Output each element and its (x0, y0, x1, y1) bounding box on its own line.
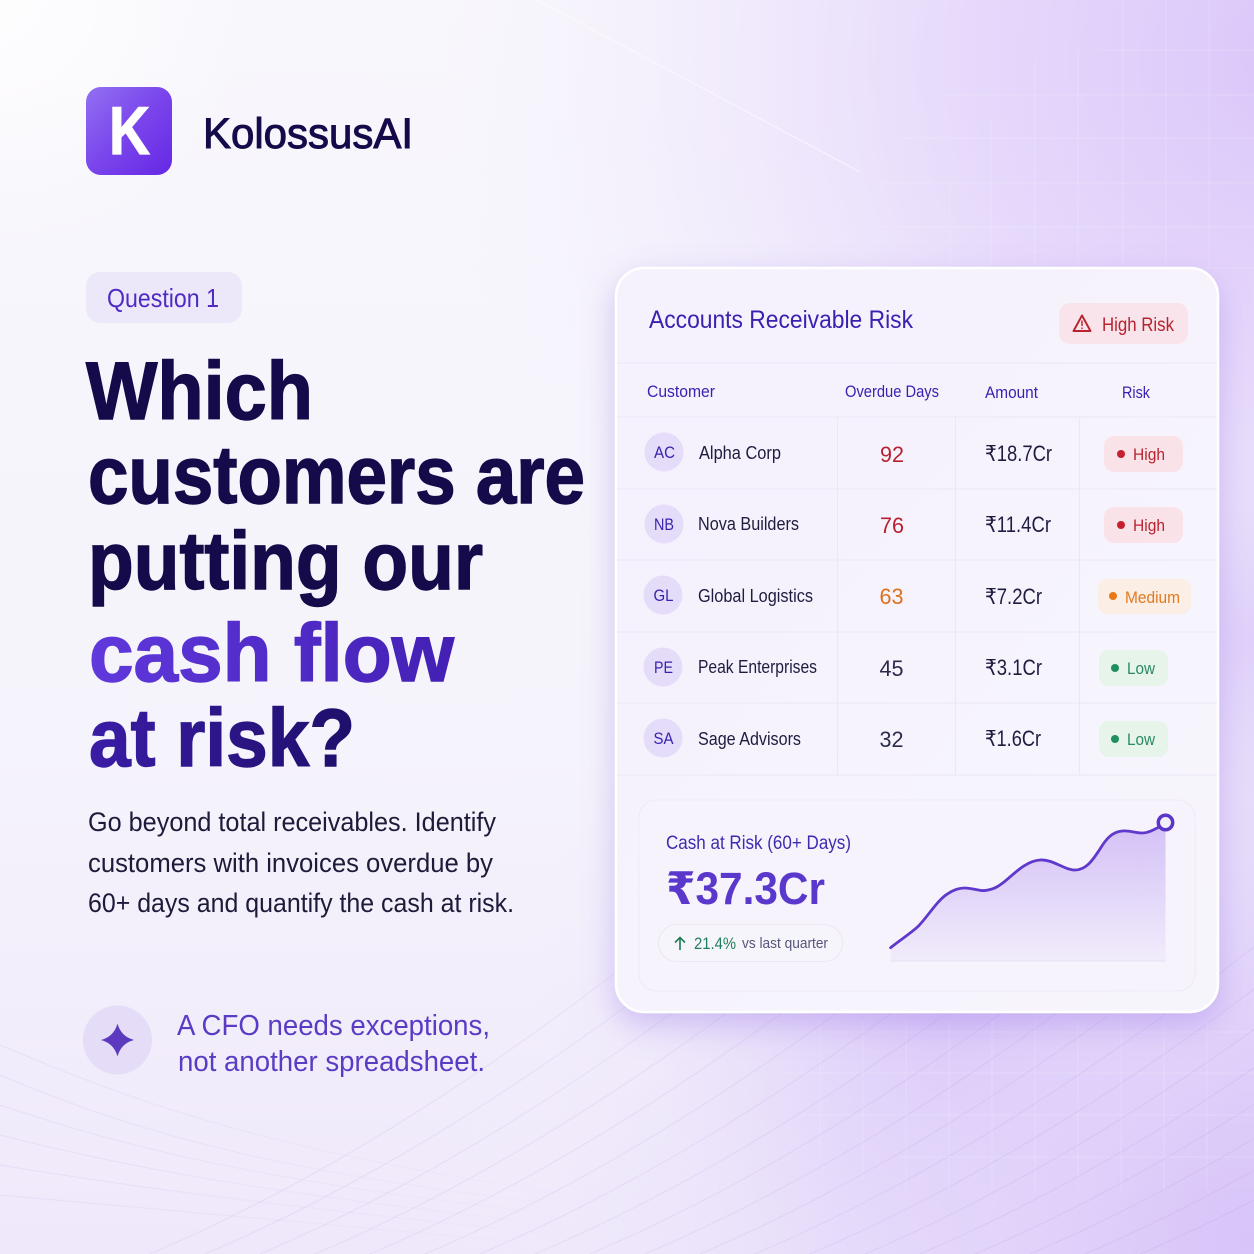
row: Global Logistics: GL (654, 586, 674, 605)
table header: Amount (985, 384, 1038, 402)
row: Alpha Corp: Alpha Corp (699, 443, 781, 463)
trend pill: 21.4% (694, 935, 736, 953)
row: Nova Builders (644, 504, 1183, 544)
headline: at risk? (89, 693, 355, 784)
row: Sage Advisors (644, 718, 1168, 758)
table header: Customer (647, 383, 715, 401)
row: Peak Enterprises: PE (654, 658, 673, 677)
trend pill: vs last quarter (742, 936, 828, 952)
row: Sage Advisors: Low (1127, 730, 1156, 749)
table header: Risk (1122, 384, 1151, 402)
supporting paragraph (88, 807, 514, 918)
row: Nova Builders: 76 (880, 513, 904, 538)
brand name: KolossusAI (203, 110, 413, 158)
headline: Which (86, 346, 313, 437)
row: Peak Enterprises: 45 (880, 656, 904, 681)
row: Nova Builders: High (1133, 516, 1165, 535)
row: Alpha Corp: 92 (880, 442, 904, 467)
row: Peak Enterprises (644, 648, 1168, 686)
row: Global Logistics (644, 576, 1191, 614)
row: Sage Advisors: Sage Advisors (698, 729, 801, 749)
row: Nova Builders: Nova Builders (698, 514, 799, 534)
tagline: A CFO needs exceptions, (177, 1010, 490, 1042)
headline (86, 346, 585, 784)
icon: K logo tile: K (109, 93, 150, 169)
table header: Overdue Days (845, 383, 939, 401)
row: Sage Advisors: SA (654, 729, 674, 748)
row: Alpha Corp (644, 432, 1183, 472)
area chart (891, 815, 1173, 961)
headline: putting our (88, 516, 483, 607)
row: Peak Enterprises: Peak Enterprises (698, 657, 817, 677)
panel: cash at risk summary (639, 800, 1195, 991)
question pill: Question 1 (107, 283, 219, 313)
icon: K logo tile (86, 87, 172, 175)
supporting paragraph: customers with invoices overdue by (88, 848, 493, 878)
row: Alpha Corp: AC (654, 443, 675, 462)
high risk badge (1059, 303, 1188, 344)
row: Alpha Corp: High (1133, 445, 1165, 464)
high risk badge: High Risk (1102, 315, 1174, 336)
row: Nova Builders: ₹11.4Cr (985, 512, 1051, 537)
row: Global Logistics: Global Logistics (698, 586, 813, 606)
card title: Accounts Receivable Risk (649, 306, 913, 334)
icon: sparkle (83, 1006, 152, 1074)
table header (647, 383, 1151, 402)
logo (86, 87, 413, 175)
panel: accounts receivable risk card (616, 268, 1218, 1012)
row: Global Logistics: Medium (1125, 588, 1180, 607)
question pill (86, 272, 242, 323)
row: Alpha Corp: ₹18.7Cr (985, 441, 1052, 466)
row: Sage Advisors: ₹1.6Cr (985, 726, 1041, 751)
trend pill (658, 924, 842, 962)
headline: customers are (88, 430, 585, 521)
supporting paragraph: 60+ days and quantify the cash at risk. (88, 888, 514, 918)
row: Nova Builders: NB (654, 515, 674, 534)
row: Sage Advisors: 32 (880, 727, 904, 752)
row: Global Logistics: 63 (880, 584, 904, 609)
supporting paragraph: Go beyond total receivables. Identify (88, 807, 496, 837)
summary label: Cash at Risk (60+ Days) (666, 833, 851, 854)
summary value: ₹37.3Cr (666, 863, 825, 914)
tagline (177, 1010, 490, 1078)
row: Peak Enterprises: ₹3.1Cr (985, 655, 1042, 680)
headline: cash flow (89, 608, 454, 699)
row: Global Logistics: ₹7.2Cr (985, 584, 1042, 609)
row: Peak Enterprises: Low (1127, 659, 1156, 678)
tagline: not another spreadsheet. (178, 1046, 485, 1078)
